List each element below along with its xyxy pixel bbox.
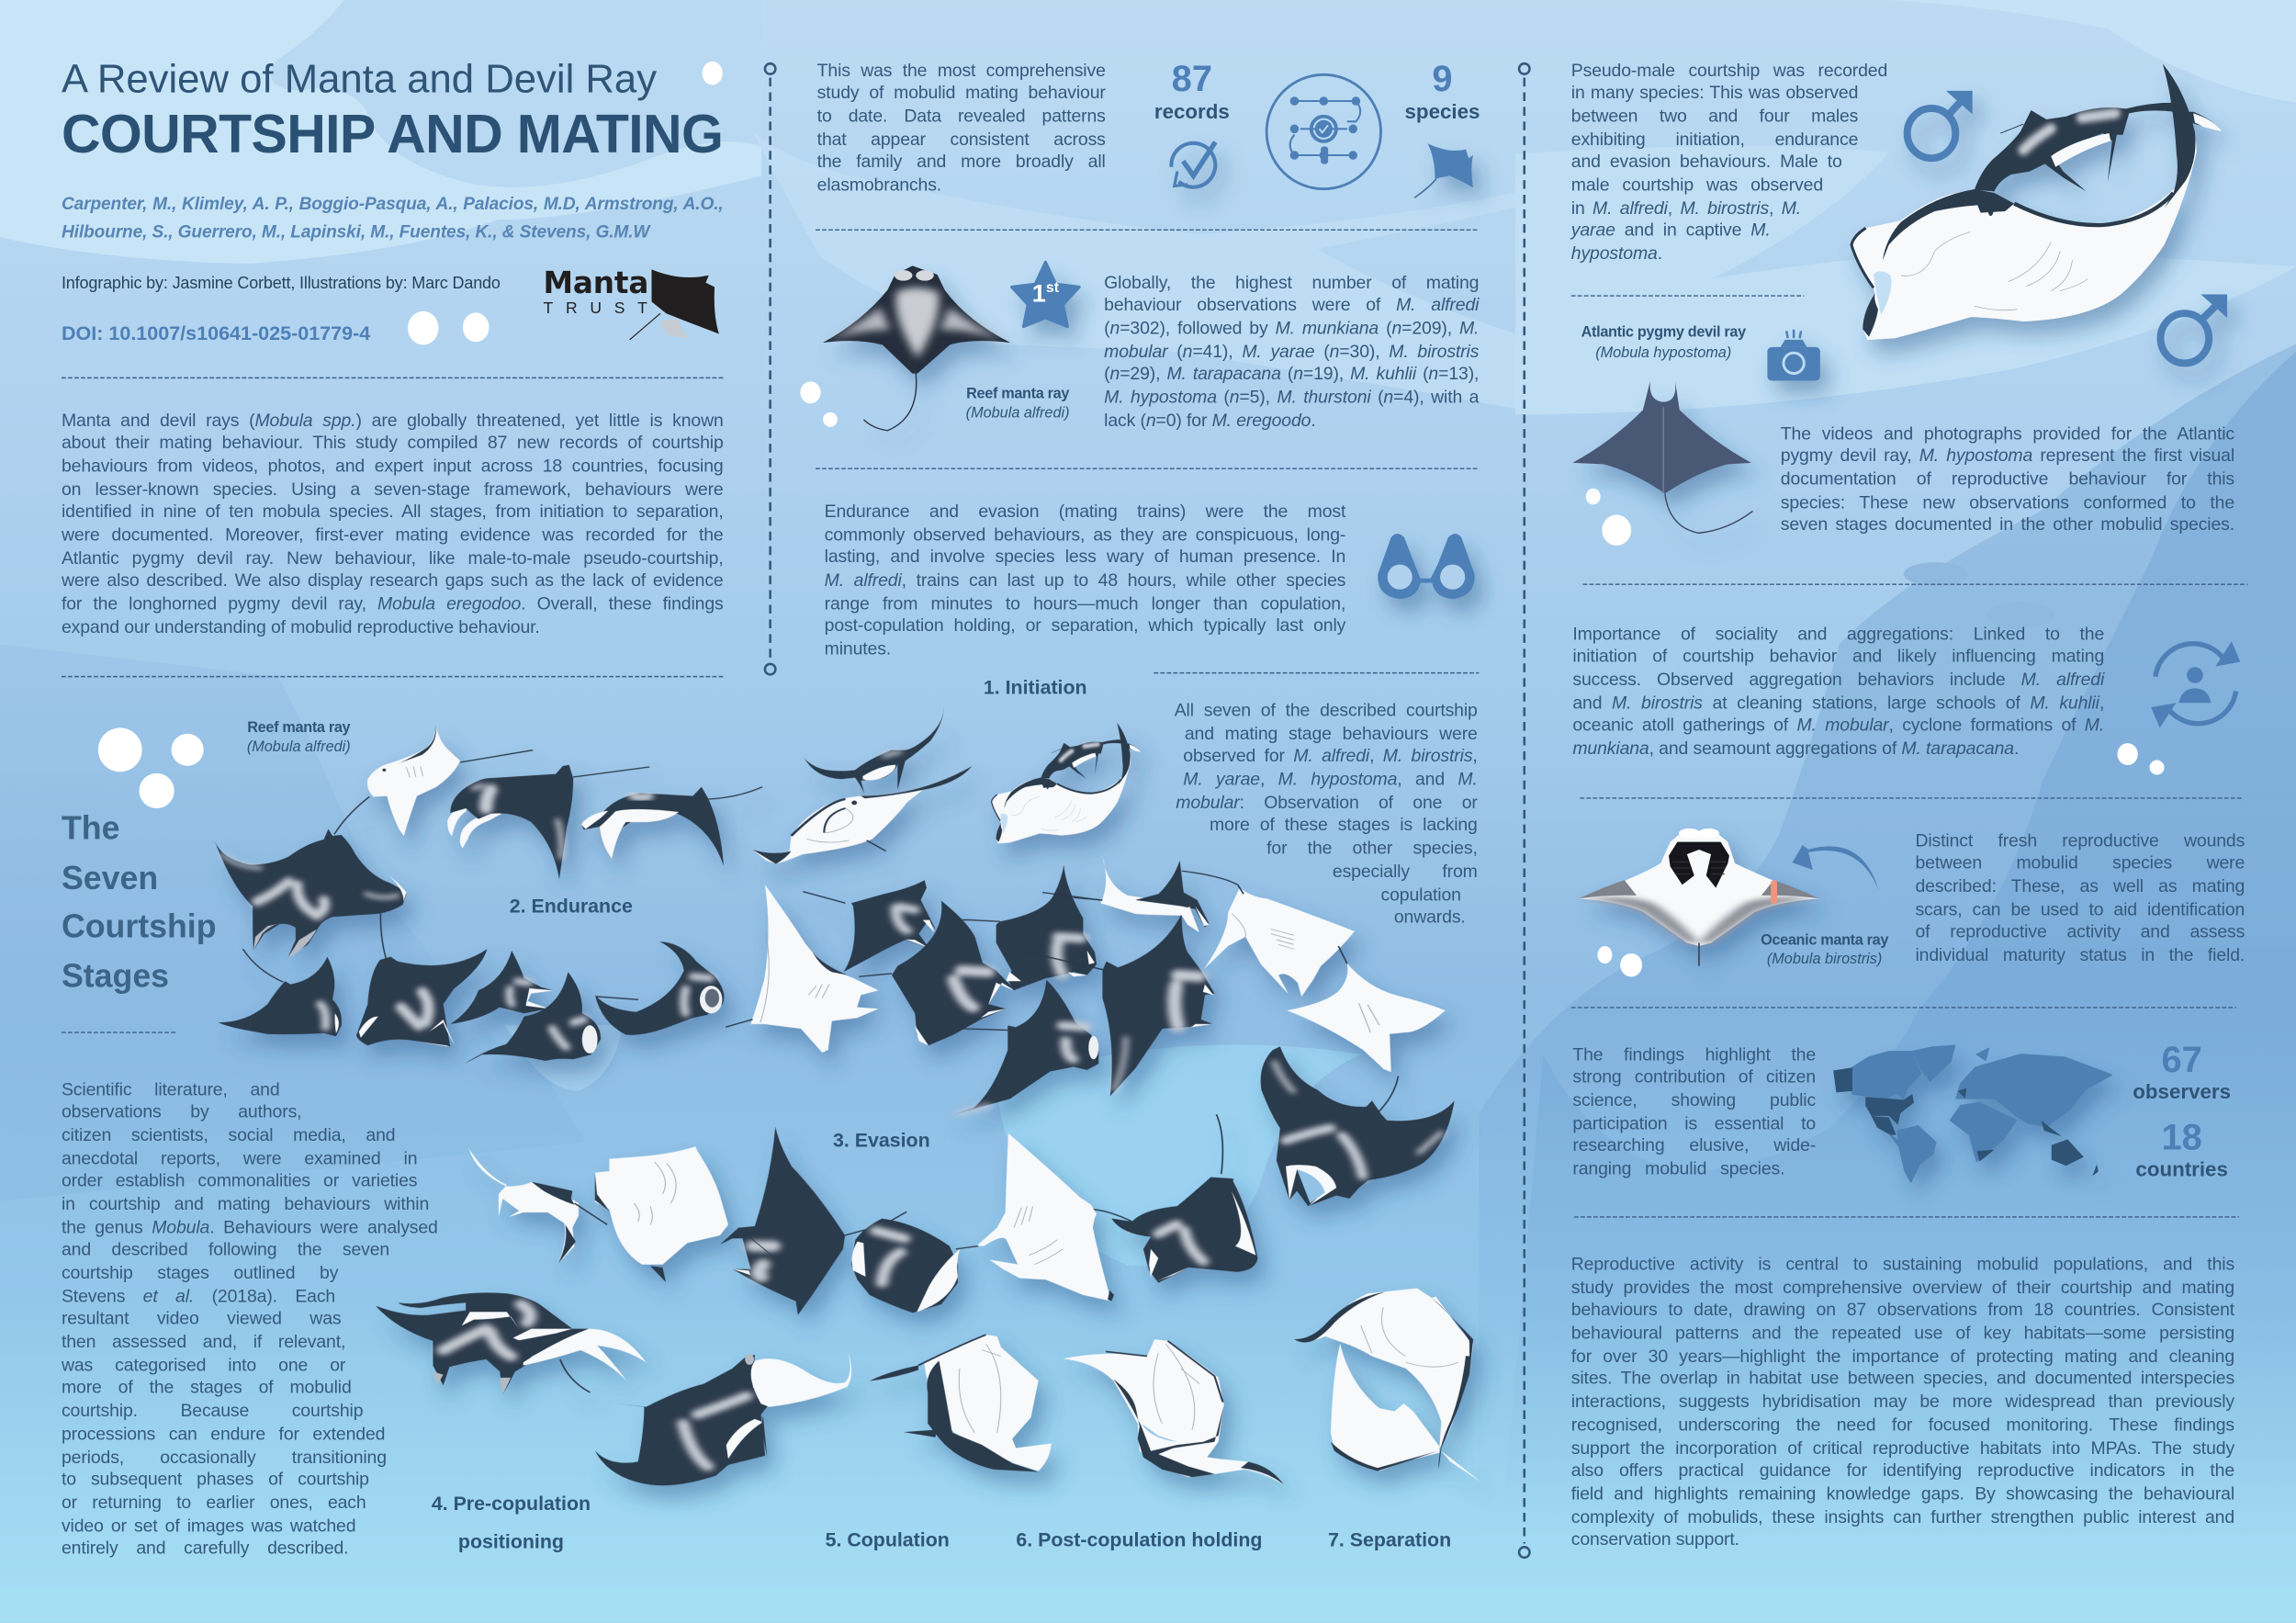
label: pre-copulation positioning: 4. Pre-copulation [432, 1493, 591, 1515]
ray: evasion small white dark [468, 1148, 607, 1264]
text block: methods: citizen scientists, social media, and [62, 1124, 395, 1145]
text block: reproductive wounds: between mobulid species were [1915, 852, 2245, 873]
heading: the seven courtship stages: Stages [62, 957, 169, 994]
stat: 18 countries: countries [2135, 1157, 2228, 1180]
caption: reef manta stages: (Mobula alfredi) [247, 739, 351, 756]
stat: 9 species [1405, 59, 1480, 123]
ray: row two dark two [356, 912, 487, 1047]
text block: methods: anecdotal reports, were examined in [62, 1147, 417, 1168]
text block: atlantic pygmy devil ray: seven stages documented in the other mobulid species. [1781, 514, 2234, 535]
ray: evasion white slim [956, 1133, 1114, 1302]
text block: endurance and evasion [825, 501, 1346, 659]
icon: cycle with person [2151, 641, 2240, 727]
text block: seven stages right aligned: for the other species, [1266, 838, 1478, 859]
text block: methods: in courtship and mating behaviours within [62, 1193, 429, 1214]
ray: evasion dark six [859, 901, 1016, 1045]
text block: sociality and aggregations: Importance of sociality and aggregations: Linked to the [1572, 623, 2104, 644]
caption: oceanic manta ray [1761, 930, 1888, 971]
ray: evasion white rounded [595, 1146, 728, 1282]
label: endurance: 2. Endurance [510, 895, 633, 917]
stat: 9 species: species [1405, 99, 1480, 123]
text block: abstract: Atlantic pygmy devil ray. New behaviour, like male-to-male pseudo-courtship, [62, 547, 724, 568]
icon: binoculars [1378, 534, 1475, 599]
text block: endurance and evasion: M. alfredi, trains can last up to 48 hours, while other species [825, 569, 1345, 591]
text block: observation counts [1104, 272, 1480, 430]
stat: 18 countries [2116, 1118, 2247, 1182]
text block: methods: Scientific literature, and [62, 1078, 280, 1099]
authors [62, 193, 724, 241]
text block: methods: was categorised into one or [62, 1354, 345, 1375]
text block: methods: resultant video viewed was [62, 1308, 341, 1329]
ray: separation bottom white [1331, 1344, 1480, 1482]
stat: 87 records: records [1154, 99, 1230, 123]
icon: first place star [1012, 262, 1079, 327]
text block: conclusions: behavioural patterns and the repeated use of key habitats—some persisting [1571, 1323, 2234, 1343]
logo text: Manta Trust: Manta [544, 265, 648, 300]
text block: abstract: were documented. Moreover, first-ever mating evidence was recorded for the [62, 524, 724, 545]
label: pre-copulation positioning: positioning [458, 1530, 564, 1552]
text block: pseudo-male courtship [1570, 60, 1887, 264]
stage rays group [215, 701, 1480, 1485]
text block: comprehensive study: the family and more broadly all [817, 152, 1106, 172]
text block: pseudo-male courtship: and evasion behaviours. Male to [1571, 152, 1842, 172]
logo text: Manta Trust: TRUST [544, 300, 660, 318]
icon: process flow circle [1266, 74, 1381, 189]
text block: citizen science: strong contribution of citizen [1572, 1066, 1816, 1087]
text block: observation counts: (n=302), followed by M. munkiana (n=209), M. [1104, 318, 1479, 338]
ray: endurance pair right [992, 723, 1141, 843]
stat: 67 observers [2116, 1040, 2247, 1104]
text block: methods: video or set of images was watched [62, 1515, 355, 1536]
text block: sociality and aggregations: and M. birostris at cleaning stations, large schools of M. kuhlii, [1572, 692, 2104, 713]
text block: conclusions: Reproductive activity is central to sustaining mobulid populations, and this [1571, 1254, 2234, 1274]
text block: conclusions: also offers practical guidance for identifying reproductive indicators in the [1571, 1460, 2234, 1481]
text block: pseudo-male courtship: in M. alfredi, M. birostris, M. [1571, 197, 1801, 218]
text block: citizen science: participation is essential to [1572, 1112, 1816, 1133]
ray: reef manta dorsal top [823, 265, 1010, 431]
text block: abstract: about their mating behaviour. This study compiled 87 new records of courtship [62, 433, 724, 453]
text block: abstract [62, 410, 724, 637]
text block: observation counts: Globally, the highest number of mating [1104, 272, 1479, 292]
text block: conclusions: recognised, underscoring the need for focused monitoring. These findings [1571, 1414, 2234, 1435]
text block: sociality and aggregations: munkiana, and seamount aggregations of M. tarapacana. [1572, 738, 2019, 759]
text block: seven stages right aligned: observed for M. alfredi, M. birostris, [1183, 746, 1478, 766]
text block: pseudo-male courtship: in many species: This was observed [1571, 83, 1858, 103]
text block: citizen science: researching elusive, wide- [1572, 1135, 1816, 1155]
ray: evasion mixed white dark [1074, 856, 1238, 932]
ray: pre-copulation pair one [376, 1292, 647, 1394]
text block: sociality and aggregations: initiation of courtship behavior and likely influencing mating [1572, 646, 2104, 667]
ray: reef manta large [215, 829, 406, 958]
text block: methods: more of the stages of mobulid [62, 1377, 352, 1398]
text block: seven stages right aligned: onwards. [1394, 907, 1466, 928]
title block [62, 56, 723, 164]
text block: endurance and evasion: post-copulation holding, or separation, which typically last only [825, 615, 1345, 637]
text block: observation counts: lack (n=0) for M. eregoodo. [1104, 410, 1316, 430]
ray: row two dark one [219, 949, 342, 1036]
stat: 87 records [1154, 59, 1230, 123]
credits: Infographic by: Jasmine Corbett, Illustrations by: Marc Dando [62, 276, 501, 293]
label: evasion: 3. Evasion [833, 1129, 930, 1151]
text block: conclusions: for over 30 years—highlight the importance of protecting mating and cleaning [1571, 1346, 2234, 1366]
ray: row two dark four [595, 941, 724, 1035]
ray: initiation white [334, 724, 533, 836]
text block: atlantic pygmy devil ray: The videos and photographs provided for the Atlantic [1781, 423, 2234, 443]
text block: citizen science [1572, 1043, 1816, 1181]
text block: conclusions: study provides the most comprehensive overview of their courtship and mating [1571, 1277, 2234, 1297]
text block: pseudo-male courtship: yarae and in captive M. [1571, 220, 1771, 241]
heading: the seven courtship stages: Courtship [62, 908, 217, 944]
text block: endurance and evasion: commonly observed behaviours, as they are conspicuous, long- [825, 524, 1345, 545]
ray: endurance pair left white [752, 766, 973, 864]
authors: Hilbourne, S., Guerrero, M., Lapinski, M., Fuentes, K., & Stevens, G.M.W [62, 220, 649, 241]
text block: seven stages right aligned: especially from [1333, 861, 1478, 882]
text block: reproductive wounds: scars, can be used to aid identification [1915, 898, 2245, 919]
text block: observation counts: M. hypostoma (n=5), M. thurstoni (n=4), with a [1104, 387, 1479, 407]
text block: conclusions: complexity of mobulids, these insights can further strengthen public interest and [1571, 1506, 2234, 1527]
caption: reef manta stages: Reef manta ray [247, 720, 350, 736]
text block: endurance and evasion: lasting, and involve species less wary of human presence. In [825, 547, 1345, 568]
text block: reproductive wounds [1915, 829, 2245, 965]
text block: citizen science: ranging mobulid species. [1572, 1158, 1784, 1178]
text block: reproductive wounds: Distinct fresh reproductive wounds [1915, 829, 2245, 851]
ray: atlantic pygmy devil ray [1572, 381, 1752, 533]
doi: DOI: 10.1007/s10641-025-01779-4 [62, 322, 370, 344]
icon: male symbol one [1908, 91, 1973, 158]
stat: 9 species: 9 [1432, 59, 1453, 99]
ray: following dark one [447, 765, 649, 879]
caption: atlantic pygmy devil ray: Atlantic pygmy devil ray [1581, 325, 1746, 341]
illustration: male to male pseudo-courtship pair [1851, 63, 2223, 340]
ray: pre-copulation two [595, 1352, 851, 1485]
stat: 67 observers: 67 [2161, 1040, 2202, 1081]
ray: post-copulation pair [1063, 1339, 1284, 1484]
text block: seven stages right aligned: copulation [1381, 884, 1461, 905]
ray: oceanic manta ventral [1579, 828, 1819, 966]
text block: pseudo-male courtship: between two and four males [1571, 106, 1858, 126]
text block: pseudo-male courtship: Pseudo-male courtship was recorded [1571, 60, 1887, 80]
text block: methods: Stevens et al. (2018a). Each [62, 1285, 335, 1306]
ray: white ventral one [1204, 885, 1355, 997]
text block: comprehensive study: elasmobranchs. [817, 175, 941, 195]
heading: the seven courtship stages: The [62, 810, 119, 847]
text block: conclusions: conservation support. [1571, 1529, 1739, 1550]
label: pre-copulation positioning [432, 1493, 591, 1552]
logo: Manta Trust ray [630, 269, 719, 340]
ray: following dark two [581, 787, 762, 866]
authors: Carpenter, M., Klimley, A. P., Boggio-Pasqua, A., Palacios, M.D, Armstrong, A.O., [62, 193, 724, 214]
text block: endurance and evasion: range from minutes to hours—much longer than copulation, [825, 592, 1345, 614]
ray: evasion dark tall centre [720, 1127, 906, 1315]
text block: comprehensive study: This was the most comprehensive [817, 60, 1106, 80]
text block: reproductive wounds: of reproductive activity and assess [1915, 921, 2245, 942]
text block: conclusions: support the incorporation of critical reproductive habitats into MPAs. The study [1571, 1437, 2234, 1458]
ray: evasion dark seven [944, 865, 1100, 990]
text block: observation counts: (n=29), M. tarapacana (n=19), M. kuhlii (n=13), [1104, 364, 1479, 384]
logo text: Manta Trust [544, 265, 660, 318]
text block: conclusions: interactions, suggests hybridisation may be more widespread than previously [1571, 1392, 2234, 1412]
text block: seven stages right aligned: mobular: Observation of one or [1176, 792, 1478, 812]
dots: bubbles [98, 62, 2165, 976]
text block: citizen science: science, showing public [1572, 1089, 1816, 1110]
text block: atlantic pygmy devil ray: pygmy devil ray, M. hypostoma represent the first visual [1781, 445, 2234, 466]
heading: the seven courtship stages [62, 810, 217, 994]
text block: comprehensive study: study of mobulid mating behaviour [817, 83, 1106, 103]
text block: endurance and evasion: minutes. [825, 638, 891, 659]
text block: abstract: were also described. We also display research gaps such as the lack of evidence [62, 570, 724, 591]
text block: conclusions: sites. The overlap in habitat use between species, and documented interspecies [1571, 1369, 2234, 1389]
text block: comprehensive study: that appear consistent across [817, 129, 1106, 149]
text block: methods: or returning to earlier ones, each [62, 1492, 366, 1513]
text block: atlantic pygmy devil ray [1781, 423, 2234, 535]
text block: reproductive wounds: individual maturity status in the field. [1915, 944, 2245, 965]
text block: reproductive wounds: described: These, as well as mating [1915, 875, 2245, 896]
text block: conclusions: field and highlights remaining knowledge gaps. By showcasing the behavioural [1571, 1483, 2234, 1504]
ray: evasion dark nine tall [1027, 914, 1214, 1096]
caption: oceanic manta ray: (Mobula birostris) [1767, 952, 1882, 968]
text block: endurance and evasion: Endurance and evasion (mating trains) were the most [825, 501, 1345, 522]
text block: methods [62, 1078, 438, 1559]
stat: 18 countries: 18 [2161, 1118, 2202, 1158]
ray: evasion big white [726, 885, 878, 1053]
label: initiation: 1. Initiation [984, 677, 1087, 699]
caption: reef manta top: Reef manta ray [966, 386, 1069, 402]
ray: evasion dark last [1093, 1114, 1257, 1283]
text block: methods: entirely and carefully described. [62, 1538, 348, 1559]
ray: white ventral two [1287, 946, 1446, 1072]
ray: row two small [450, 951, 554, 1024]
text block: pseudo-male courtship: male courtship was observed [1571, 175, 1823, 195]
text block: seven stages right aligned: and mating stage behaviours were [1185, 723, 1478, 743]
title line two: COURTSHIP AND MATING [62, 104, 723, 164]
text block: sociality and aggregations: oceanic atoll gatherings of M. mobular, cyclone formations of M. [1572, 715, 2104, 736]
caption: reef manta stages [247, 720, 351, 756]
label: separation: 7. Separation [1328, 1528, 1451, 1550]
text block: observation counts: behaviour observations were of M. alfredi [1104, 295, 1479, 315]
ray: row two dark three [465, 972, 601, 1064]
text block: sociality and aggregations [1572, 623, 2105, 759]
text block: pseudo-male courtship: exhibiting initiation, endurance [1571, 129, 1858, 149]
text block: abstract: on lesser-known species. Using a seven-stage framework, behaviours were [62, 479, 724, 499]
text block: methods: processions can endure for extended [62, 1423, 385, 1444]
heading: the seven courtship stages: Seven [62, 859, 158, 896]
text block: methods: observations by authors, [62, 1101, 301, 1122]
text block: abstract: identified in nine of ten mobula species. All stages, from initiation to separation, [62, 502, 724, 522]
text block: pseudo-male courtship: hypostoma. [1571, 243, 1662, 264]
text block: methods: order establish commonalities or varieties [62, 1170, 417, 1191]
text block: methods: courtship. Because courtship [62, 1400, 363, 1421]
text block: methods: to subsequent phases of courtship [62, 1469, 369, 1490]
chart: world map of contributing countries [1833, 1045, 2111, 1182]
text block: conclusions: behaviours to date, drawing on 87 observations from 18 countries. Consistent [1571, 1300, 2234, 1320]
caption: oceanic manta ray: Oceanic manta ray [1761, 932, 1888, 948]
caption: reef manta top: (Mobula alfredi) [966, 406, 1070, 422]
label: copulation: 5. Copulation [826, 1528, 950, 1550]
text block: atlantic pygmy devil ray: documentation of reproductive behaviour for this [1781, 468, 2234, 489]
text block: methods: courtship stages outlined by [62, 1262, 338, 1283]
text block: methods: the genus Mobula. Behaviours were analysed [62, 1216, 438, 1237]
title line one: A Review of Manta and Devil Ray [62, 56, 657, 101]
text block: citizen science: The findings highlight the [1572, 1043, 1816, 1064]
text block: abstract: for the longhorned pygmy devil ray, Mobula eregodoo. Overall, these findings [62, 593, 724, 614]
text block: observation counts: mobular (n=41), M. yarae (n=30), M. birostris [1104, 341, 1479, 361]
label: post-copulation holding: 6. Post-copulation holding [1016, 1528, 1262, 1550]
text block: seven stages right aligned: All seven of the described courtship [1175, 700, 1478, 720]
arrow: points to wound [1793, 845, 1879, 890]
star label: 1st: 1st [1032, 280, 1059, 308]
icon: check mark in cycle arrows [1171, 142, 1215, 187]
text block: seven stages right aligned [1174, 700, 1478, 928]
caption: atlantic pygmy devil ray: (Mobula hypostoma) [1595, 345, 1731, 361]
ray: endurance pair left small [804, 701, 944, 795]
text block: sociality and aggregations: success. Observed aggregation behaviors include M. alfredi [1572, 669, 2104, 690]
text block: abstract: expand our understanding of mobulid reproductive behaviour. [62, 616, 540, 637]
stat: 67 observers: observers [2133, 1079, 2231, 1103]
text block: seven stages right aligned: M. yarae, M. hypostoma, and M. [1183, 769, 1478, 789]
ray: evasion dark eight [953, 980, 1098, 1114]
text block: methods: and described following the seven [62, 1239, 389, 1260]
ray: copulation pair [870, 1335, 1052, 1471]
ray: large dark right [1261, 1046, 1455, 1206]
text block: atlantic pygmy devil ray: species: These new observations conformed to the [1781, 491, 2234, 512]
ray: separation top white [1294, 1289, 1473, 1470]
stat: 87 records: 87 [1172, 59, 1212, 99]
text block: comprehensive study: to date. Data revealed patterns [817, 106, 1106, 126]
text block: methods: periods, occasionally transitioning [62, 1446, 387, 1467]
icon: male symbol two [2161, 294, 2227, 363]
ray: evasion dark rounded [851, 1219, 960, 1313]
text block: comprehensive study [817, 60, 1106, 195]
text block: conclusions [1571, 1254, 2234, 1552]
text block: seven stages right aligned: more of these stages is lacking [1210, 815, 1478, 835]
icon: small ray silhouette [1414, 143, 1473, 197]
ray: evasion dark five [803, 880, 936, 972]
caption: atlantic pygmy devil ray [1581, 325, 1746, 361]
text block: abstract: behaviours from videos, photos, and expert input across 18 countries, focusing [62, 456, 724, 476]
caption: reef manta top [966, 386, 1070, 422]
text block: methods: then assessed and, if relevant, [62, 1331, 345, 1352]
text block: abstract: Manta and devil rays (Mobula spp.) are globally threatened, yet little is known [62, 410, 724, 430]
icon: camera [1767, 330, 1820, 381]
